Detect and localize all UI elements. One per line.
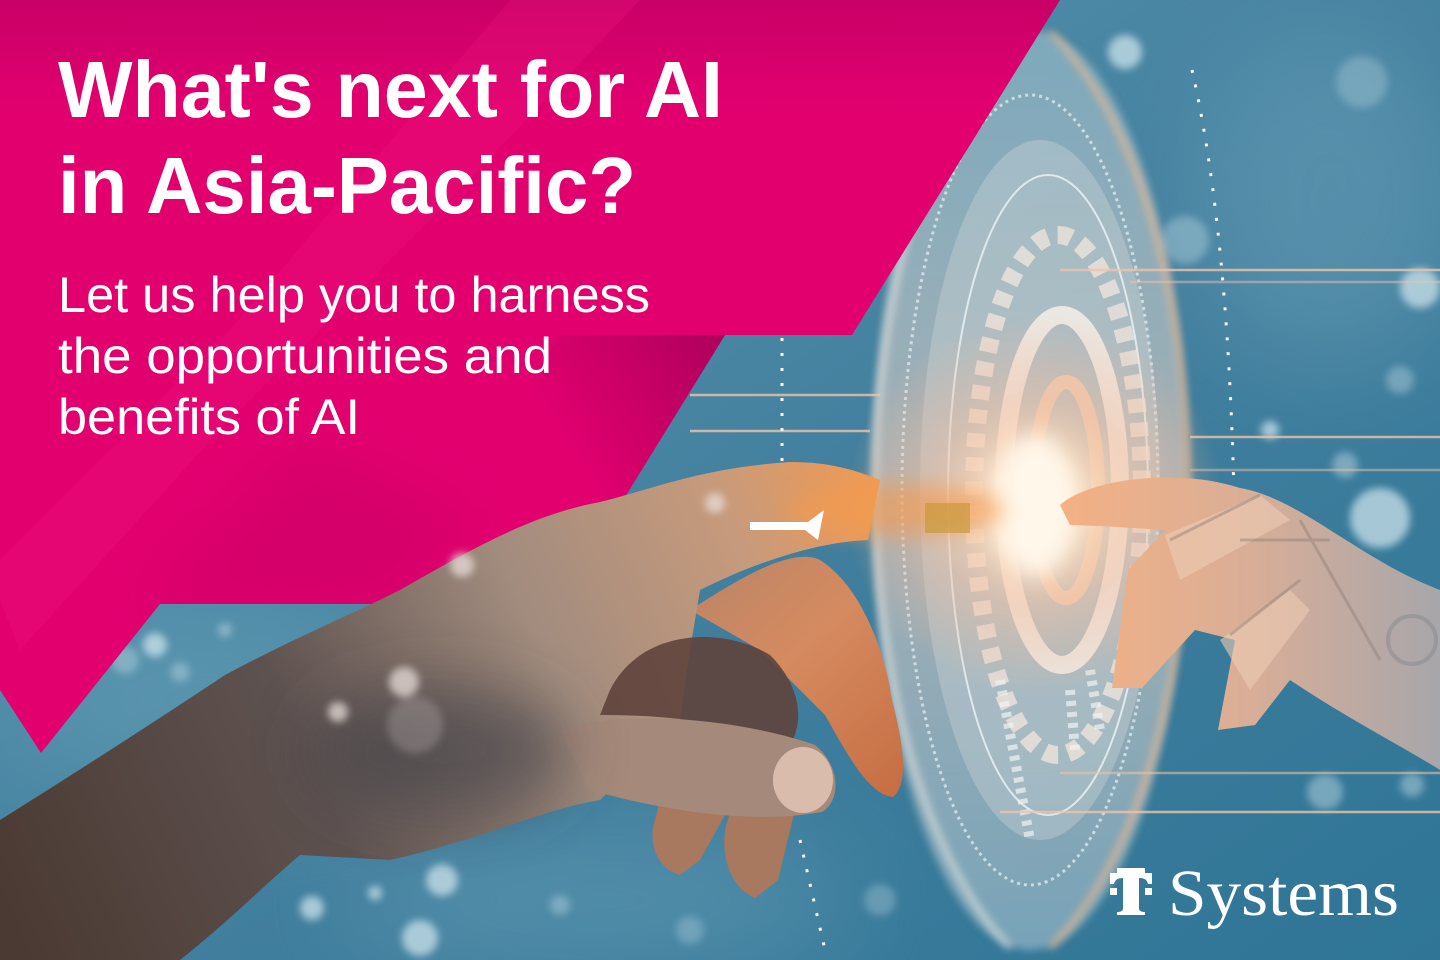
robot hand [1060,477,1440,770]
middle finger [690,557,903,797]
title [58,45,723,230]
lower fingers [652,800,795,898]
thumb [560,718,836,817]
subtitle [58,267,650,445]
shadow between fingers [600,637,798,745]
skin highlights [328,493,725,753]
magenta banner [0,0,1100,753]
title: What's next for AI [58,45,723,134]
hand shadow [310,685,570,815]
T-Systems logo: Systems [1168,857,1399,930]
subtitle: the opportunities and [58,328,552,384]
human hand [0,462,903,960]
palm and index finger [0,462,880,960]
subtitle: Let us help you to harness [58,267,650,323]
dashed guide lines [782,70,1235,950]
icon: T mark [1110,868,1152,915]
holographic disc [845,30,1225,950]
light streaks [690,270,1440,812]
title: in Asia-Pacific? [58,141,636,230]
fingertip glow [750,484,1005,540]
subtitle: benefits of AI [58,389,360,445]
